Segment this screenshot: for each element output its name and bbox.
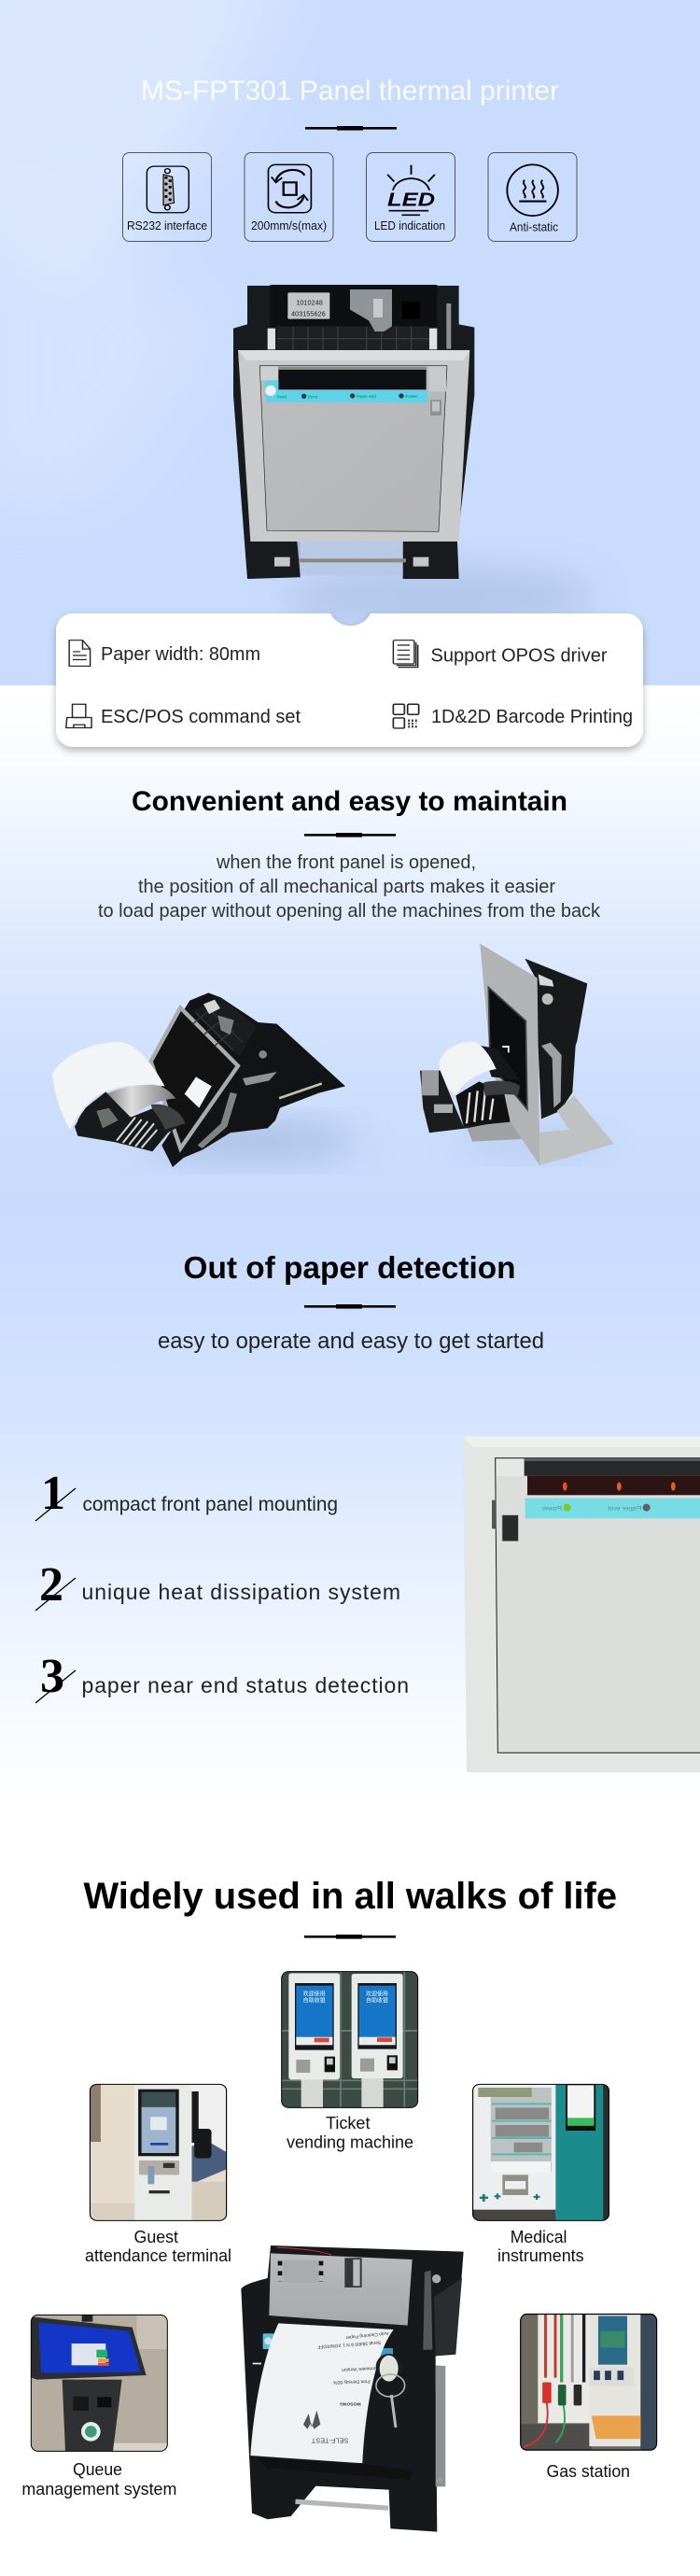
list item 1: 1 bbox=[41, 1467, 65, 1520]
product photo: front panel close-up bbox=[463, 1436, 700, 1772]
application: queue management system bbox=[21, 2315, 176, 2499]
photo: self-service kiosks: 自助收银 bbox=[366, 1997, 388, 2005]
heading: maintenance: Convenient and easy to maintain bbox=[132, 786, 567, 817]
spec card bbox=[56, 613, 643, 747]
background: maintenance section bbox=[0, 774, 700, 1208]
icon: serial connector bbox=[147, 166, 189, 213]
photo: self-service kiosks: 自助收银 bbox=[303, 1997, 326, 2005]
application: queue management system: management system bbox=[21, 2480, 176, 2499]
feature: RS232 interface: RS232 interface bbox=[127, 218, 207, 232]
product photo: printer front: Feed bbox=[277, 394, 287, 399]
application: gas station bbox=[521, 2314, 657, 2481]
product photo: printer with printed receipt: SELF-TEST bbox=[311, 2437, 348, 2445]
spec card: Support OPOS driver bbox=[431, 646, 608, 667]
icon: rotation square bbox=[268, 164, 311, 213]
description text bbox=[98, 852, 601, 922]
heading: paper detection: Out of paper detection bbox=[183, 1250, 515, 1285]
application: ticket vending machine bbox=[282, 1972, 418, 2151]
feature: anti-static bbox=[488, 153, 577, 241]
description text: to load paper without opening all the machines from the back bbox=[98, 901, 601, 922]
photo: queue kiosk bbox=[31, 2315, 167, 2451]
product photo: printer with printed receipt: Serial 38400 8 N 1 XON/XOFF bbox=[317, 2340, 381, 2349]
product photo: printer with printed receipt: Print Density 60% bbox=[332, 2378, 371, 2385]
list item 3: paper near end status detection bbox=[82, 1673, 409, 1697]
spec card: 1D&2D Barcode Printing bbox=[431, 707, 633, 727]
icon: stacked pages bbox=[393, 640, 418, 668]
icon: LED lamp: LED bbox=[387, 190, 435, 211]
list item 2: 2 bbox=[39, 1558, 63, 1612]
list item 1 bbox=[35, 1467, 338, 1521]
product photo: printer front: Paper end bbox=[357, 394, 376, 399]
application: guest attendance terminal: Guest bbox=[134, 2228, 178, 2246]
icon: printer bbox=[66, 704, 91, 728]
product photo: printer with printed receipt: Firmware Version bbox=[342, 2365, 378, 2372]
icon: QR code bbox=[393, 704, 419, 728]
product photo: printer front: Power bbox=[405, 394, 418, 399]
application: ticket vending machine: vending machine bbox=[287, 2133, 413, 2151]
photo: fuel dispenser bbox=[521, 2314, 657, 2450]
list item 3: 3 bbox=[40, 1650, 64, 1703]
list item 3 bbox=[35, 1650, 409, 1703]
photo: self-service kiosks: 欢迎使用 bbox=[303, 1990, 326, 1997]
description text: the position of all mechanical parts makes it easier bbox=[138, 877, 555, 897]
application: queue management system: Queue bbox=[73, 2460, 122, 2479]
list item 2 bbox=[35, 1558, 400, 1612]
subheading: easy to operate and easy to get started bbox=[158, 1329, 544, 1354]
product photo: printer with printed receipt: MOSONG bbox=[340, 2400, 361, 2406]
feature: print speed: 200mm/s(max) bbox=[251, 218, 327, 232]
photo: self-service kiosks bbox=[282, 1972, 418, 2108]
product photo: printer front bbox=[233, 285, 474, 579]
list item 1: compact front panel mounting bbox=[82, 1494, 338, 1515]
photo: attendance kiosk bbox=[90, 2084, 227, 2220]
feature: RS232 interface bbox=[123, 153, 211, 241]
product photo: opened printer, side view bbox=[420, 944, 614, 1165]
product photo: printer front: 403155626 bbox=[291, 310, 326, 318]
background: header panel bbox=[0, 0, 700, 685]
heading: applications: Widely used in all walks of life bbox=[84, 1876, 617, 1917]
application: medical instruments: instruments bbox=[497, 2246, 584, 2265]
product photo: front panel close-up: Power bbox=[540, 1505, 562, 1512]
product photo: printer with printed receipt: Auto Cleaning Paper bbox=[345, 2330, 389, 2340]
application: guest attendance terminal bbox=[85, 2084, 231, 2265]
description text: when the front panel is opened, bbox=[216, 852, 476, 873]
list item 2: unique heat dissipation system bbox=[82, 1580, 400, 1604]
application: guest attendance terminal: attendance terminal bbox=[85, 2246, 231, 2265]
product photo: opened printer, angled bbox=[52, 992, 345, 1167]
feature: LED indication bbox=[366, 153, 455, 241]
application: ticket vending machine: Ticket bbox=[326, 2114, 370, 2133]
icon: document bbox=[69, 640, 91, 666]
product photo: printer with printed receipt bbox=[241, 2245, 464, 2532]
spec card: Paper width: 80mm bbox=[101, 644, 260, 665]
product photo: printer front: 1010248 bbox=[296, 299, 323, 307]
feature: anti-static: Anti-static bbox=[510, 220, 558, 233]
feature: LED indication: LED indication bbox=[374, 218, 445, 232]
application: medical instruments bbox=[473, 2084, 609, 2265]
photo: self-service kiosks: 欢迎使用 bbox=[366, 1990, 388, 1997]
product photo: printer front: Error bbox=[308, 394, 318, 399]
product photo: front panel close-up: Paper end bbox=[608, 1505, 641, 1512]
icon: heat waves bbox=[507, 164, 558, 216]
title: MS-FPT301 Panel thermal printer bbox=[141, 76, 559, 106]
application: gas station: Gas station bbox=[547, 2462, 630, 2481]
application: medical instruments: Medical bbox=[511, 2228, 567, 2246]
photo: medicine vending machine bbox=[473, 2084, 609, 2220]
feature: print speed bbox=[245, 153, 333, 241]
spec card: ESC/POS command set bbox=[101, 707, 301, 727]
background: detection section bbox=[0, 1208, 700, 1806]
